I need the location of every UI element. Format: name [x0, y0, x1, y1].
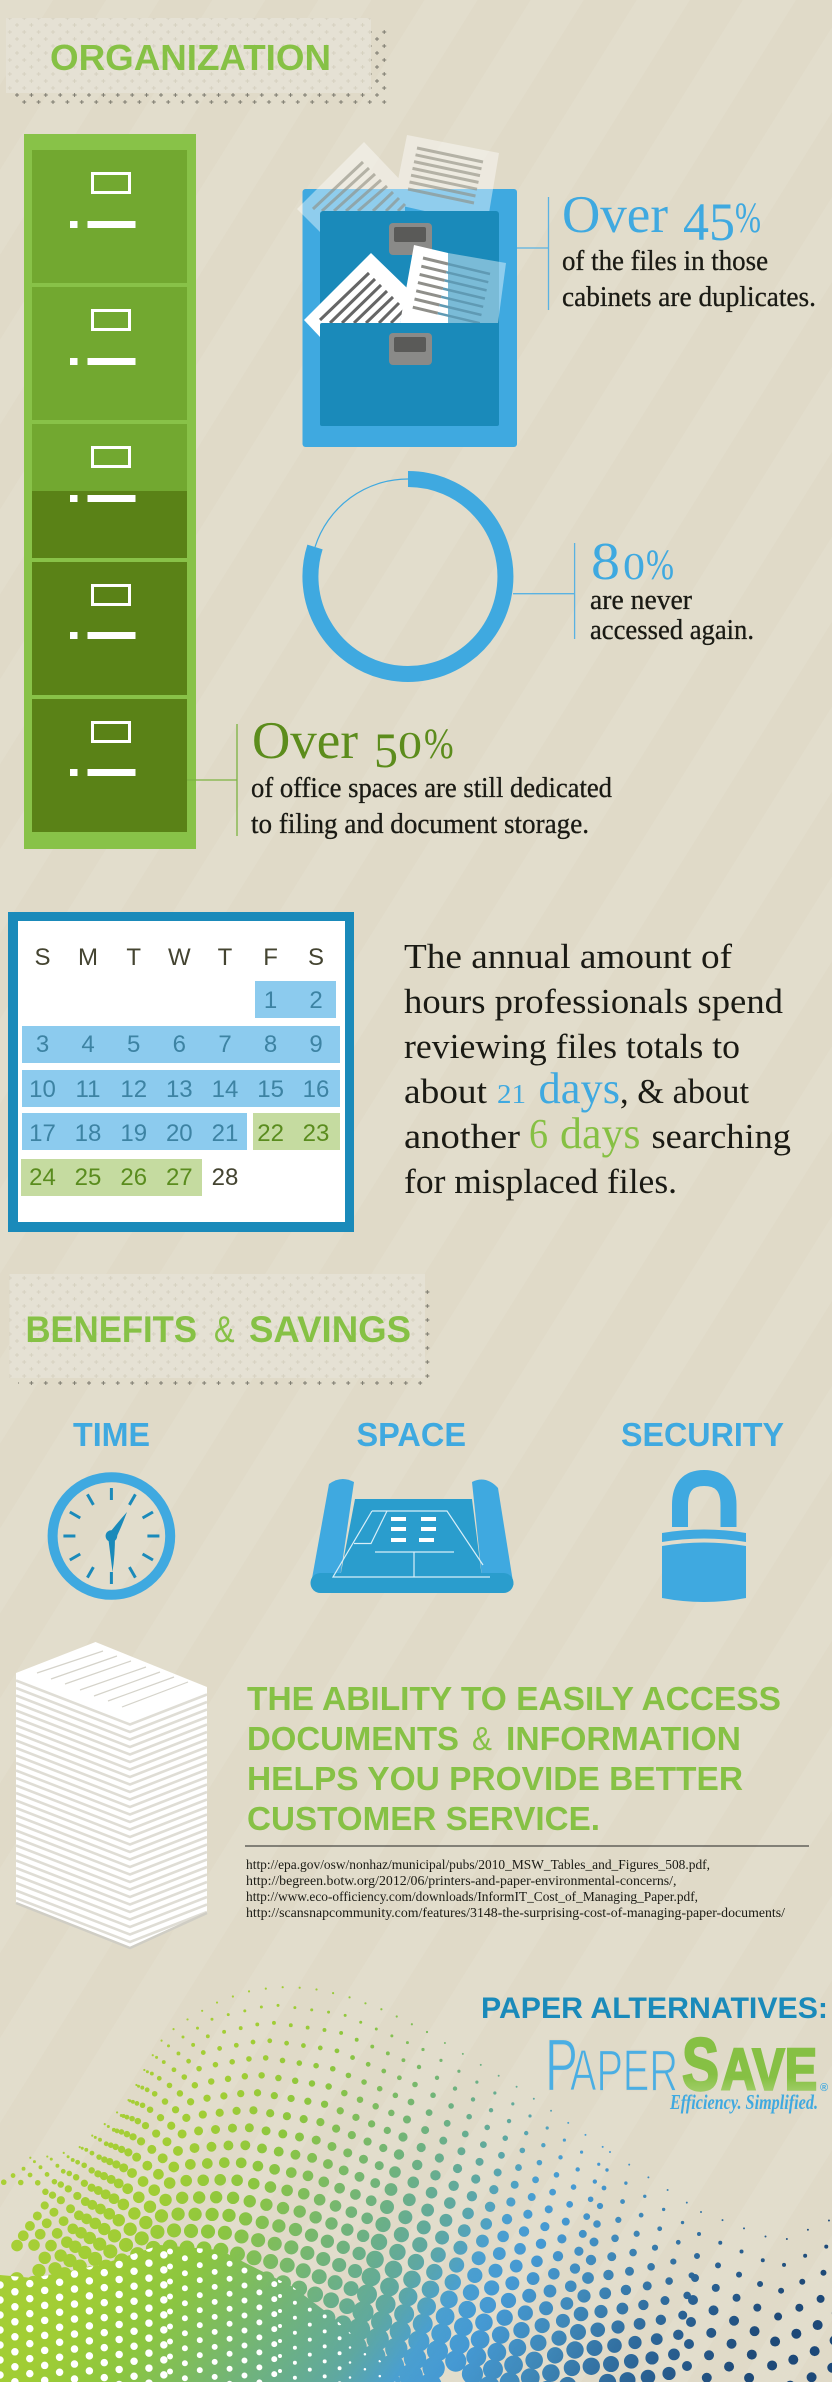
text block: annual hours reviewing and searching: reviewing files totals to	[404, 1027, 740, 1066]
heading: the ability to easily access: THE ABILITY TO EASILY ACCESS	[247, 1680, 781, 1717]
calendar: 26	[120, 1164, 147, 1191]
icon: clock	[53, 1477, 170, 1595]
text block: annual hours reviewing and searching: hours professionals spend	[404, 982, 784, 1021]
calendar: T	[126, 944, 141, 971]
calendar: 17	[29, 1120, 56, 1147]
calendar	[8, 912, 354, 1232]
callout: over 45% duplicates: cabinets are duplicates.	[562, 282, 816, 313]
callout: over 45% duplicates: Over	[562, 186, 668, 244]
callout: over 50% office space	[187, 712, 612, 840]
callout: over 50% office space: Over	[252, 712, 358, 770]
calendar: 6	[173, 1031, 186, 1058]
calendar: T	[218, 944, 233, 971]
text block: annual hours reviewing and searching: searching	[652, 1117, 791, 1156]
calendar: 18	[75, 1120, 101, 1147]
callout: 80% never accessed: 8	[591, 533, 620, 591]
calendar: 8	[264, 1031, 277, 1058]
logo: papersave: S	[682, 2023, 719, 2106]
text block: annual hours reviewing and searching: for misplaced files.	[404, 1162, 677, 1201]
callout: 80% never accessed: are never	[590, 585, 693, 616]
callout: over 50% office space: 0	[398, 725, 422, 767]
icon: padlock	[662, 1478, 746, 1602]
callout: over 50% office space: to filing and document storage.	[251, 809, 589, 840]
calendar: 23	[303, 1120, 329, 1147]
calendar: W	[168, 944, 191, 971]
calendar: 1	[264, 987, 277, 1014]
heading: security: SECURITY	[621, 1416, 784, 1453]
sources list	[245, 1846, 809, 1920]
calendar: 21	[212, 1120, 238, 1147]
heading: the ability to easily access: HELPS YOU PROVIDE BETTER	[247, 1760, 743, 1797]
calendar: 11	[76, 1076, 100, 1103]
logo: papersave: APER	[570, 2038, 678, 2104]
callout: over 45% duplicates: 45	[683, 192, 735, 252]
sources list: http://epa.gov/osw/nonhaz/municipal/pubs/2010_MSW_Tables_and_Figures_508.pdf,	[246, 1857, 710, 1872]
callout: over 45% duplicates	[517, 186, 816, 313]
heading: the ability to easily access: CUSTOMER SERVICE.	[247, 1800, 600, 1837]
heading: space: SPACE	[356, 1416, 466, 1453]
icon: stack of paper	[16, 1642, 207, 1948]
heading: time: TIME	[73, 1416, 150, 1453]
text block: annual hours reviewing and searching: The annual amount of	[404, 937, 732, 976]
calendar: M	[78, 944, 98, 971]
callout: 80% never accessed: accessed again.	[590, 615, 754, 646]
calendar: 14	[212, 1076, 238, 1103]
heading: the ability to easily access: DOCUMENTS	[247, 1720, 459, 1757]
calendar: 10	[29, 1076, 56, 1103]
text block: annual hours reviewing and searching: , & about	[620, 1072, 749, 1111]
icon: blue open file drawer with papers	[297, 135, 517, 447]
text block: annual hours reviewing and searching: days	[560, 1109, 640, 1158]
calendar: 13	[166, 1076, 193, 1103]
calendar: 20	[166, 1120, 193, 1147]
calendar: 4	[81, 1031, 95, 1058]
sources list: http://begreen.botw.org/2012/06/printers-and-paper-environmental-concerns/,	[246, 1873, 676, 1888]
calendar: 16	[303, 1076, 329, 1103]
heading banner: organization: ORGANIZATION	[50, 37, 331, 78]
text block: annual hours reviewing and searching: another	[404, 1117, 520, 1156]
calendar: F	[263, 944, 278, 971]
sources list: http://scansnapcommunity.com/features/3148-the-surprising-cost-of-managing-paper-documents/	[246, 1905, 785, 1920]
heading banner: benefits and savings: SAVINGS	[249, 1309, 411, 1350]
heading: the ability to easily access	[247, 1680, 781, 1837]
calendar: 28	[212, 1164, 238, 1191]
calendar: 3	[36, 1031, 49, 1058]
heading banner: benefits and savings	[10, 1274, 430, 1387]
calendar: 9	[309, 1031, 323, 1058]
sources list: http://www.eco-officiency.com/downloads/InformIT_Cost_of_Managing_Paper.pdf,	[246, 1889, 698, 1904]
calendar: 22	[257, 1120, 284, 1147]
calendar: 12	[120, 1076, 147, 1103]
calendar: 27	[166, 1164, 193, 1191]
heading: paper alternatives: PAPER ALTERNATIVES:	[481, 1992, 828, 2025]
icon: blueprint scroll	[310, 1479, 514, 1593]
heading banner: benefits and savings: BENEFITS	[26, 1309, 197, 1350]
text block: annual hours reviewing and searching: 6	[529, 1112, 548, 1158]
calendar: 15	[257, 1076, 284, 1103]
callout: over 50% office space: of office spaces are still dedicated	[251, 773, 612, 804]
text block: annual hours reviewing and searching: days	[538, 1064, 620, 1113]
text block: annual hours reviewing and searching	[404, 937, 791, 1201]
calendar: 2	[309, 987, 323, 1014]
callout: over 45% duplicates: %	[735, 195, 761, 242]
calendar: S	[308, 944, 324, 971]
callout: 80% never accessed	[513, 533, 754, 646]
calendar: 25	[75, 1164, 101, 1191]
calendar: 5	[127, 1031, 140, 1058]
halftone wave	[0, 1986, 832, 2382]
text block: annual hours reviewing and searching: about	[404, 1072, 487, 1111]
heading banner: benefits and savings: &	[214, 1309, 235, 1350]
chart: 80% ring	[310, 479, 505, 674]
green filing cabinet	[24, 134, 196, 849]
callout: 80% never accessed: 0	[623, 546, 645, 588]
callout: over 50% office space: 5	[374, 722, 398, 778]
callout: over 50% office space: %	[424, 721, 454, 768]
calendar: 19	[120, 1120, 147, 1147]
callout: over 45% duplicates: of the files in those	[562, 246, 768, 277]
heading: the ability to easily access: INFORMATION	[506, 1720, 741, 1757]
heading banner: organization	[6, 18, 387, 107]
heading: the ability to easily access: &	[472, 1720, 492, 1757]
calendar: S	[34, 944, 51, 971]
calendar: 7	[218, 1031, 232, 1058]
logo: papersave	[545, 2023, 828, 2114]
logo: papersave: ®	[820, 2082, 828, 2094]
logo: papersave: P	[545, 2024, 578, 2106]
callout: 80% never accessed: %	[646, 542, 674, 589]
calendar: 24	[29, 1164, 56, 1191]
text block: annual hours reviewing and searching: 21	[497, 1079, 526, 1109]
